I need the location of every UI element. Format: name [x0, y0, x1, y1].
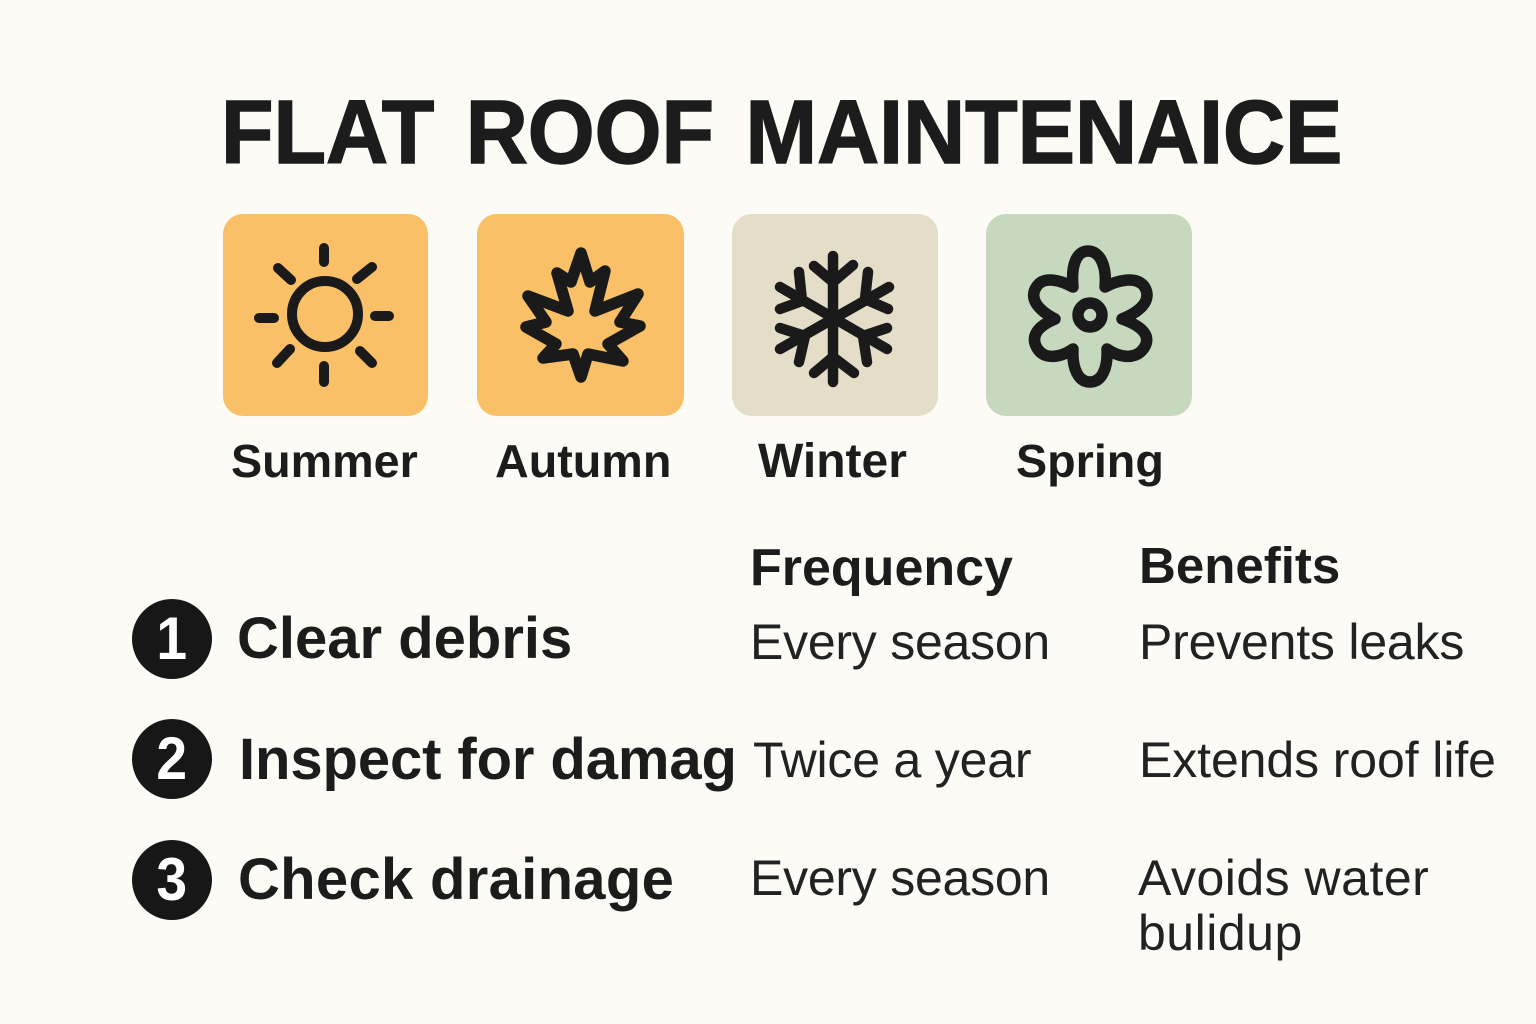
step badge 3: 3 [157, 846, 187, 913]
icon: maple leaf [520, 247, 646, 383]
step badge 2: 2 [157, 725, 187, 792]
panel: autumn tile [477, 214, 684, 416]
benefit: row 1: Prevents leaks [1139, 614, 1464, 670]
frequency: row 1: Every season [750, 614, 1050, 670]
column heading: frequency: Frequency [750, 539, 1013, 597]
step badge 1: 1 [157, 605, 187, 672]
icon: snowflake [774, 250, 894, 388]
panel: summer tile [223, 214, 428, 416]
icon: flower [1028, 245, 1153, 388]
frequency: row 3: Every season [750, 850, 1050, 906]
frequency: row 2: Twice a year [753, 732, 1031, 788]
title: FLAT ROOF MAINTENAICE [221, 83, 1342, 183]
benefit: row 3 [1138, 850, 1429, 961]
season label: summer: Summer [231, 435, 418, 487]
task: clear debris: Clear debris [237, 606, 572, 671]
icon: sun [254, 243, 394, 387]
benefit: row 3: bulidup [1138, 905, 1303, 961]
step badge 2 [132, 719, 212, 799]
season label: winter: Winter [758, 435, 907, 488]
step badge 1 [132, 599, 212, 679]
column heading: benefits: Benefits [1139, 537, 1340, 594]
task: check drainage: Check drainage [238, 847, 674, 912]
benefit: row 3: Avoids water [1138, 850, 1429, 906]
panel: spring tile [986, 214, 1192, 416]
season label: spring: Spring [1016, 435, 1164, 487]
task: inspect for damage: Inspect for damag [239, 727, 737, 792]
benefit: row 2: Extends roof life [1139, 732, 1496, 788]
step badge 3 [132, 840, 212, 920]
panel: winter tile [732, 214, 938, 416]
season label: autumn: Autumn [495, 435, 671, 487]
